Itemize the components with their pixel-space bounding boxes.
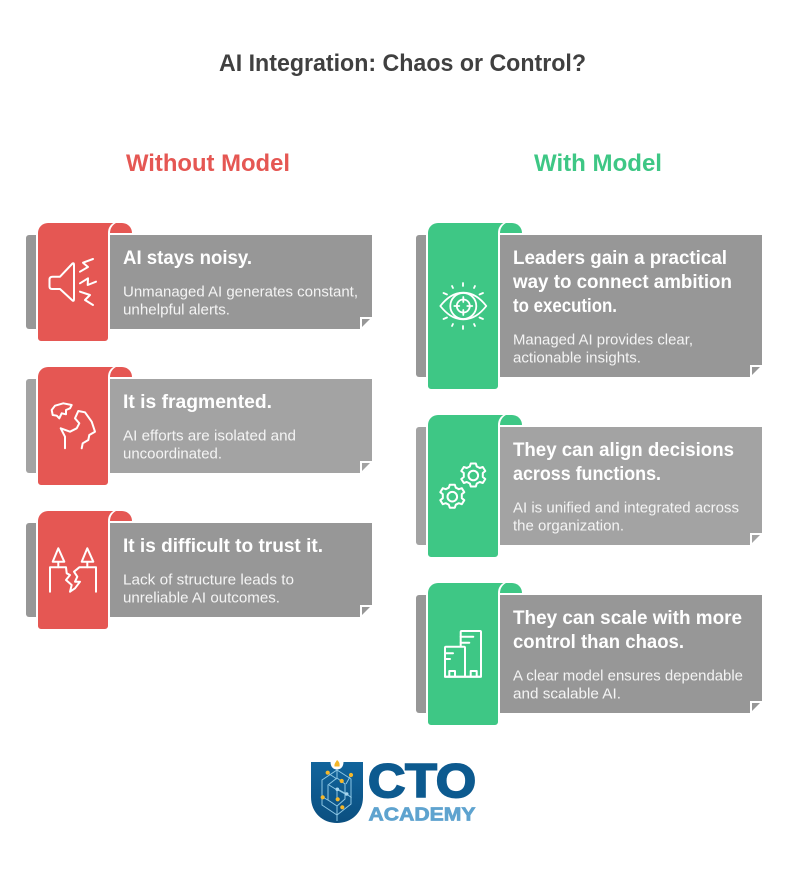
text: They can align decisions: AI is unified and integrated across — [513, 500, 739, 516]
text: Leaders gain a practical way: way to connect ambition — [512, 272, 732, 293]
icon: broken bridge with two arrows — [50, 548, 96, 592]
text: They can align decisions: the organization. — [513, 518, 624, 534]
icon: loudspeaker with noise bolts — [50, 259, 96, 305]
card: It is difficult to trust it — [26, 511, 372, 629]
text: They can scale with more control: They can scale with more — [513, 608, 742, 629]
text: It is difficult to trust it: Lack of structure leads to — [123, 572, 294, 588]
icon: eye with target — [440, 283, 486, 329]
text: It is fragmented: uncoordinated. — [123, 446, 222, 462]
text: They can scale with more control: and scalable AI. — [513, 686, 621, 702]
title: AI Integration: Chaos or Control? — [219, 50, 586, 77]
card: They can scale with more control — [416, 583, 762, 725]
text: Leaders gain a practical way: Leaders gain a practical — [513, 248, 727, 269]
heading: with model: With Model — [534, 150, 662, 177]
text: It is difficult to trust it: unreliable AI outcomes. — [123, 590, 280, 606]
text: They can scale with more control: A clear model ensures dependable — [513, 668, 743, 684]
text: Leaders gain a practical way — [512, 248, 732, 366]
text: It is fragmented: AI efforts are isolated and — [123, 428, 296, 444]
text: Leaders gain a practical way: Managed AI provides clear, — [513, 332, 693, 348]
logo wordmark: CTO — [368, 754, 476, 807]
text: AI stays noisy: AI stays noisy. — [123, 248, 252, 269]
logo: CTO Academy: ACADEMY — [368, 804, 476, 824]
text: It is fragmented: It is fragmented. — [123, 392, 272, 413]
text: It is fragmented — [123, 392, 296, 462]
text: It is difficult to trust it: It is difficult to trust it. — [123, 536, 323, 557]
icon: fragmented head — [52, 403, 95, 448]
card: It is fragmented — [26, 367, 372, 485]
icon: circuit shield — [311, 760, 363, 823]
text: AI stays noisy — [123, 248, 358, 318]
text: AI stays noisy: unhelpful alerts. — [123, 302, 230, 318]
heading: without model: Without Model — [126, 150, 290, 177]
text: They can scale with more control: control than chaos. — [513, 632, 684, 653]
text: AI stays noisy: Unmanaged AI generates constant, — [123, 284, 358, 300]
text: It is difficult to trust it — [123, 536, 323, 606]
text: They can align decisions: across functions. — [513, 464, 661, 485]
icon: two buildings — [445, 631, 481, 677]
card: Leaders gain a practical way — [416, 223, 762, 389]
text: Leaders gain a practical way: actionable insights. — [513, 350, 641, 366]
text: They can scale with more control — [513, 608, 743, 702]
text: They can align decisions — [513, 440, 739, 534]
icon: two gears — [440, 464, 485, 508]
logo: CTO Academy — [311, 754, 476, 824]
card: AI stays noisy — [26, 223, 372, 341]
card: They can align decisions — [416, 415, 762, 557]
text: Leaders gain a practical way: to execution. — [513, 296, 617, 317]
text: They can align decisions: They can align decisions — [513, 440, 734, 461]
